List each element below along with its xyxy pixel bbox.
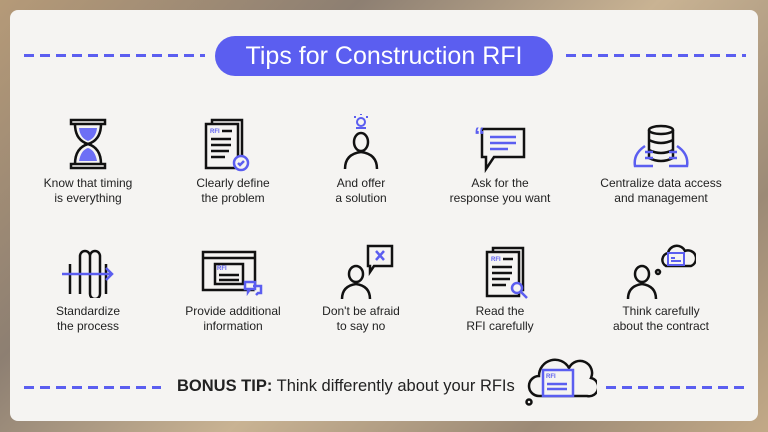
icon: document magnifier: RFI [491, 257, 501, 263]
icon: database hands [633, 124, 689, 168]
icon: browser RFI [202, 250, 262, 296]
label: timing: is everything [54, 190, 122, 204]
label: centralize: and management [614, 190, 708, 204]
label: read [466, 304, 534, 332]
label: solution [335, 176, 387, 204]
icon: person with X bubble [340, 244, 394, 299]
label: additional info: information [203, 318, 263, 332]
label: centralize [600, 176, 722, 204]
icon: standardize arrow [62, 250, 114, 298]
icon: RFI document check: RFI [210, 129, 220, 135]
label: contract: about the contract [613, 318, 709, 332]
label: say no [322, 304, 400, 332]
icon: bonus cloud: RFI [546, 374, 556, 380]
label: response [450, 176, 550, 204]
icon: document magnifier [486, 246, 528, 299]
label: define problem: Clearly define [196, 176, 270, 190]
label: read: Read the [476, 304, 524, 318]
bonus tip text: BONUS TIP: Think differently about your RFIs [177, 377, 515, 395]
label: additional info [185, 304, 281, 332]
icon: RFI document check [204, 118, 250, 172]
label: define problem [196, 176, 270, 204]
label: standardize [56, 304, 120, 332]
label: additional info: Provide additional [185, 304, 281, 318]
label: standardize: Standardize [56, 304, 120, 318]
label: define problem: the problem [201, 190, 265, 204]
label: standardize: the process [57, 318, 119, 332]
icon: speech bubble [474, 125, 526, 173]
label: timing [44, 176, 132, 204]
label: solution: And offer [337, 176, 385, 190]
icon: hourglass [70, 118, 106, 170]
icon: bonus cloud [525, 358, 597, 406]
label: response: response you want [450, 190, 550, 204]
icon: person with bulb [344, 114, 378, 169]
label: contract: Think carefully [622, 304, 700, 318]
label: centralize: Centralize data access [600, 176, 722, 190]
title: Tips for Construction RFI [246, 42, 522, 70]
label: contract [613, 304, 709, 332]
icon: person thinking cloud [626, 244, 696, 299]
label: read: RFI carefully [466, 318, 534, 332]
label: solution: a solution [335, 190, 387, 204]
label: response: Ask for the [471, 176, 529, 190]
label: say no: Don't be afraid [322, 304, 400, 318]
title [215, 36, 553, 76]
label: say no: to say no [337, 318, 385, 332]
icon: browser RFI: RFI [217, 266, 227, 272]
label: timing: Know that timing [44, 176, 132, 190]
